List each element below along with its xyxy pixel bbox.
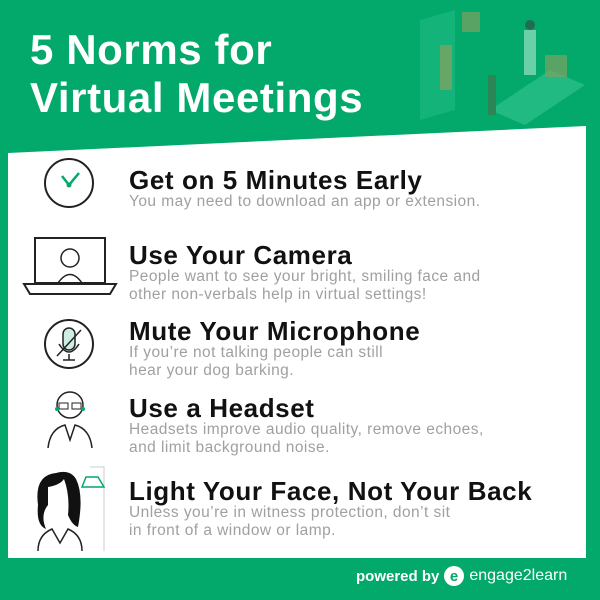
- text: If you’re not talking people can still: [129, 344, 383, 361]
- icon: clock: [44, 158, 94, 208]
- footer logo: engage2learn: [469, 567, 567, 584]
- text: People want to see your bright, smiling face and: [129, 268, 481, 285]
- title: Virtual Meetings: [30, 74, 363, 121]
- title: [30, 26, 363, 121]
- icon: laptop: [22, 237, 118, 295]
- footer logo: [356, 566, 567, 586]
- text: Unless you’re in witness protection, don’t sit: [129, 504, 450, 521]
- footer logo: powered by: [356, 568, 439, 584]
- footer logo: e: [450, 568, 459, 585]
- text: in front of a window or lamp.: [129, 522, 336, 539]
- text: and limit background noise.: [129, 439, 330, 456]
- item 3: Mute Your Microphone: [129, 316, 420, 346]
- item 1: Get on 5 Minutes Early: [129, 165, 422, 195]
- icon: headset person: [47, 391, 93, 448]
- text: You may need to download an app or extension.: [129, 193, 480, 210]
- item 5: Light Your Face, Not Your Back: [129, 476, 532, 506]
- title: 5 Norms for: [30, 26, 272, 73]
- item 4: Use a Headset: [129, 393, 315, 423]
- icon: woman with lamp: [37, 466, 106, 551]
- text: hear your dog barking.: [129, 362, 294, 379]
- item 2: Use Your Camera: [129, 240, 352, 270]
- text: other non-verbals help in virtual settings!: [129, 286, 427, 303]
- text: Headsets improve audio quality, remove echoes,: [129, 421, 484, 438]
- header illustration: [420, 10, 585, 125]
- icon: muted microphone: [44, 319, 94, 369]
